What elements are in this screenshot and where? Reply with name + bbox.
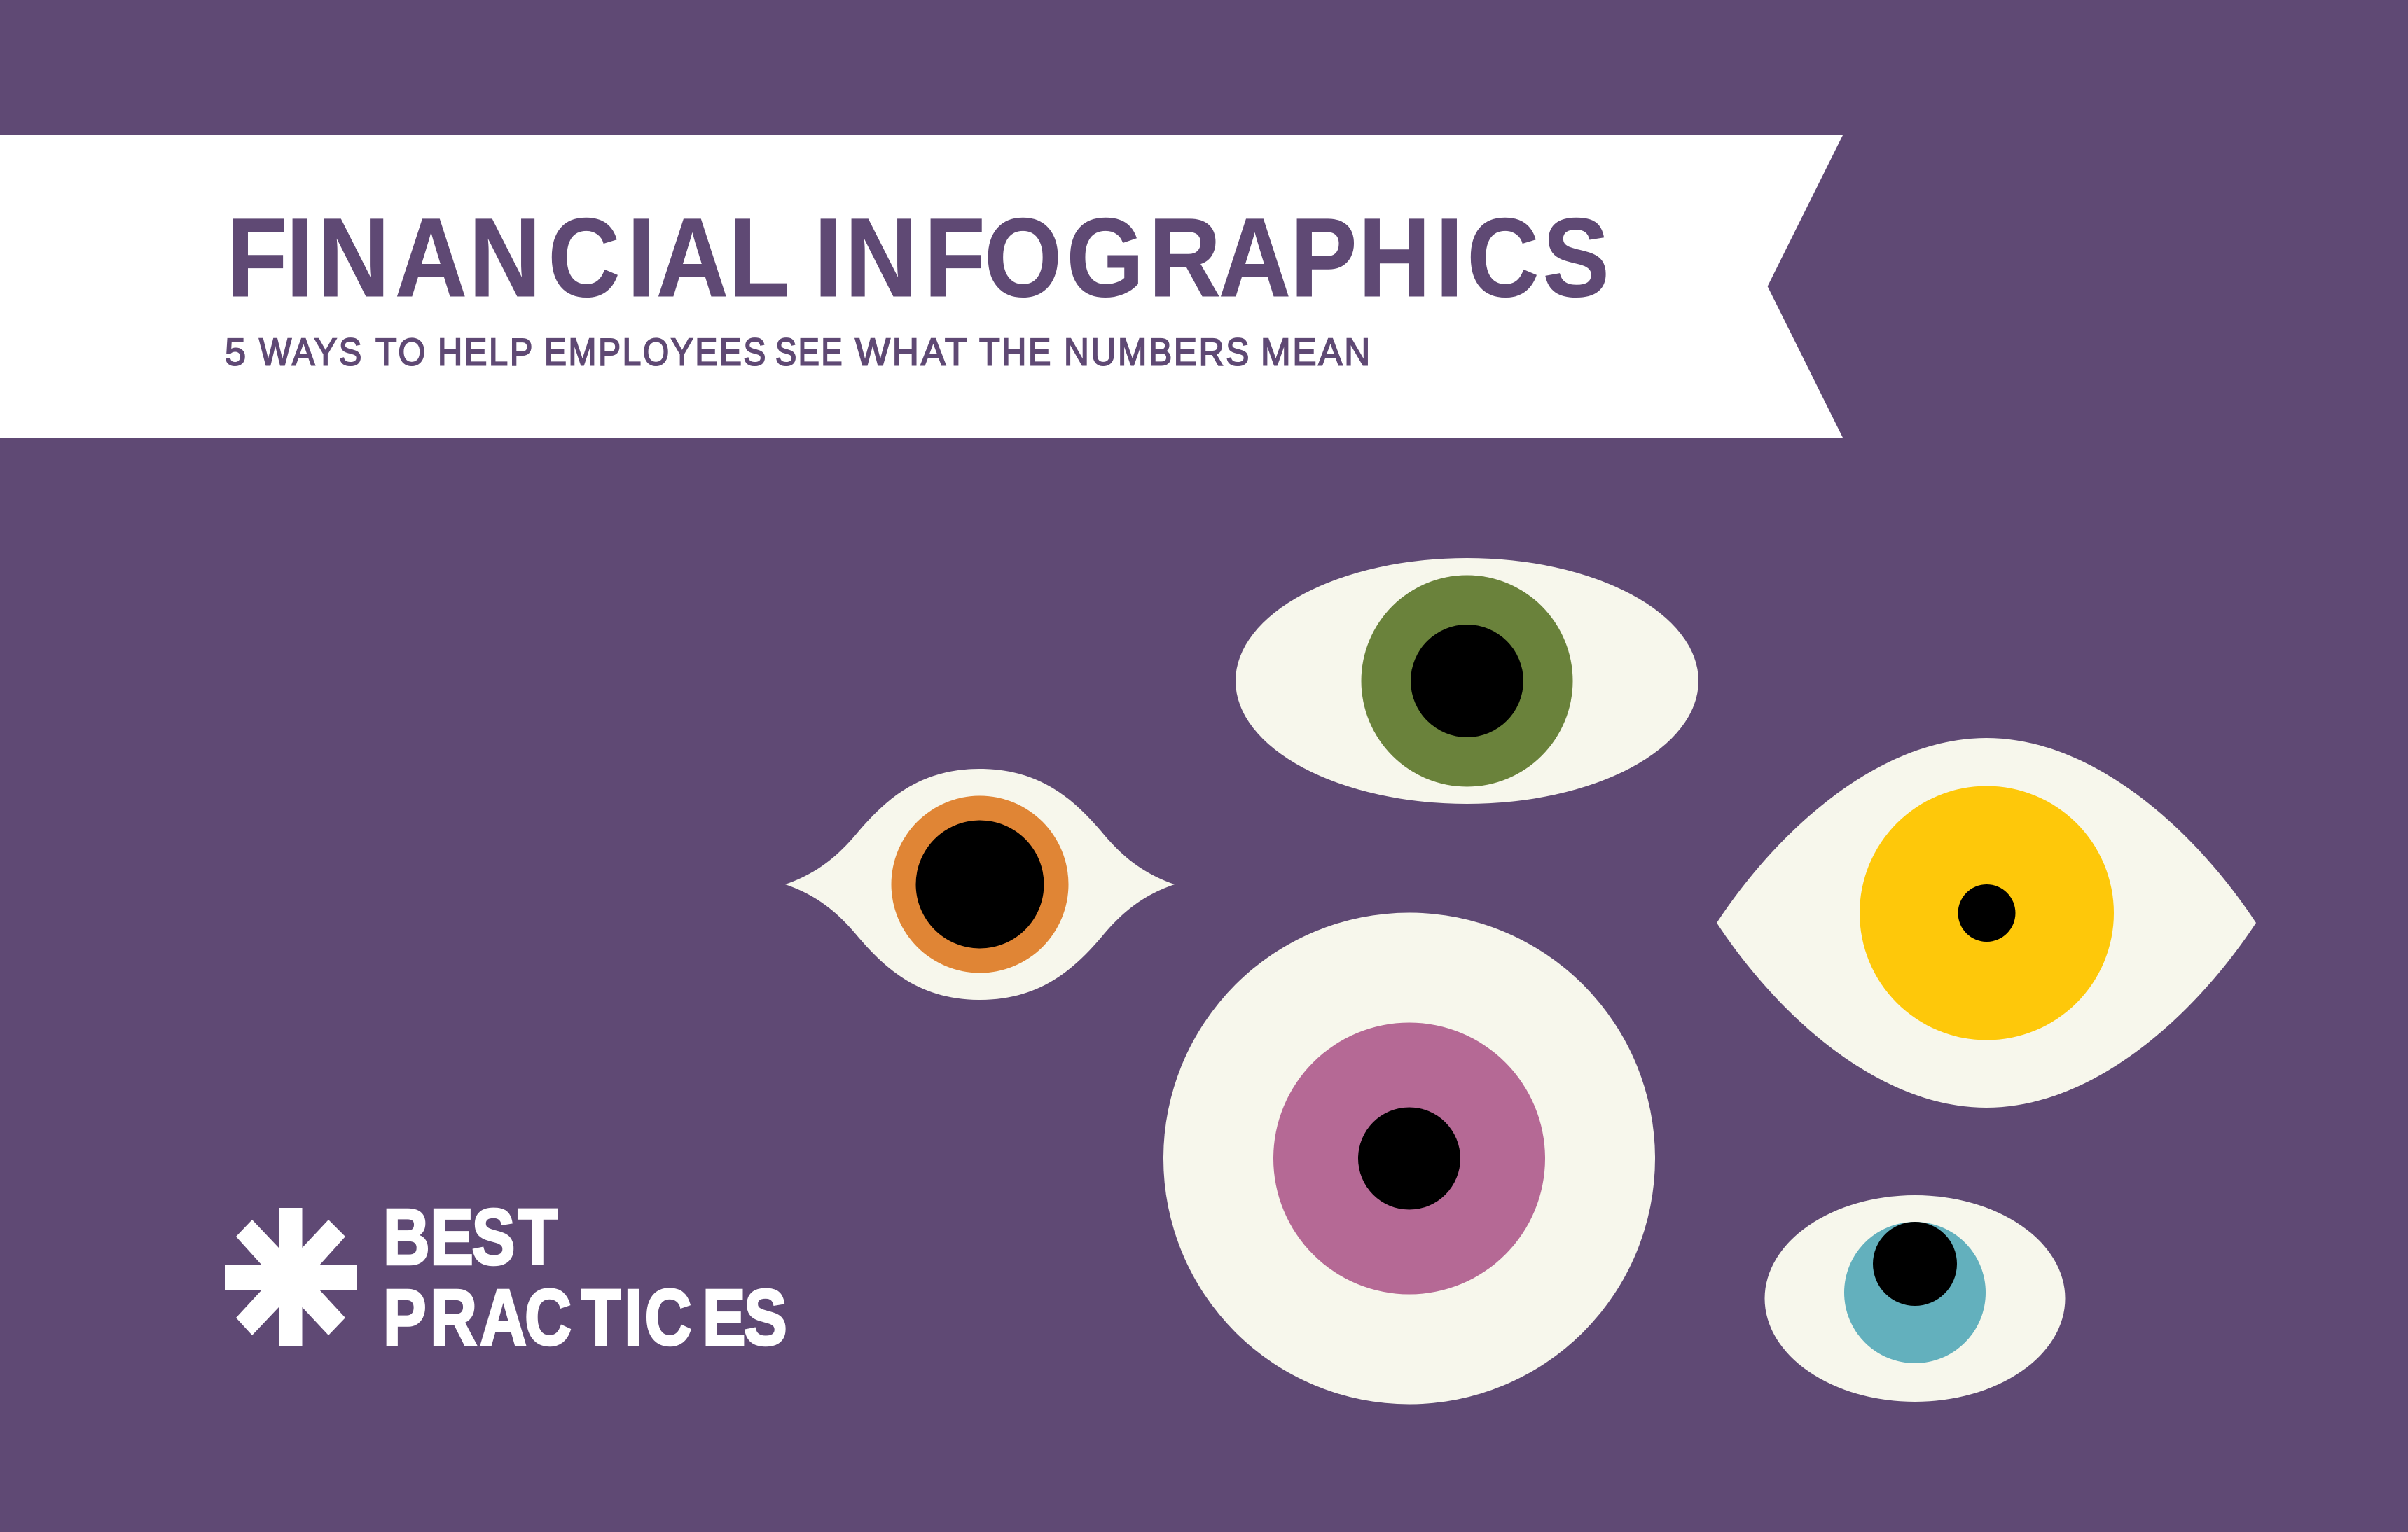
eye: orange <box>785 769 1175 1000</box>
banner: title ribbon <box>0 135 1843 438</box>
ribbon shape <box>0 135 1843 438</box>
iris <box>1860 786 2114 1040</box>
sclera <box>1236 558 1698 804</box>
pupil <box>1411 625 1523 737</box>
iris <box>1362 576 1573 787</box>
pupil <box>1958 884 2016 942</box>
subtitle: WAYS <box>259 330 364 374</box>
pupil <box>1873 1222 1957 1306</box>
subtitle: THE <box>979 330 1053 374</box>
sclera <box>1765 1195 2065 1402</box>
iris <box>1844 1222 1986 1363</box>
eye: green <box>1236 558 1698 804</box>
title: FINANCIAL INFOGRAPHICS <box>227 195 1610 321</box>
subtitle: SEE <box>775 330 844 374</box>
pupil <box>916 821 1044 948</box>
subtitle: WHAT <box>855 330 969 374</box>
logo wordmark: BEST <box>383 1192 558 1281</box>
subtitle: 5 <box>225 330 248 374</box>
eye: yellow <box>1717 738 2256 1108</box>
eye: pink <box>1163 913 1655 1405</box>
subtitle: EMPLOYEES <box>544 330 768 374</box>
logo wordmark <box>383 1192 787 1362</box>
iris <box>1273 1022 1545 1294</box>
subtitle <box>225 330 1372 374</box>
subtitle: TO <box>375 330 427 374</box>
logo: Best Practices <box>225 1192 787 1362</box>
sclera <box>1163 913 1655 1405</box>
iris <box>891 795 1069 973</box>
subtitle: MEAN <box>1261 330 1372 374</box>
pupil <box>1358 1108 1460 1210</box>
subtitle: NUMBERS <box>1064 330 1251 374</box>
logo wordmark: PRACTICES <box>383 1273 787 1362</box>
icon: asterisk <box>225 1208 357 1346</box>
sclera <box>1717 738 2256 1108</box>
subtitle: HELP <box>438 330 534 374</box>
sclera <box>785 769 1175 1000</box>
eye: teal <box>1765 1195 2065 1402</box>
